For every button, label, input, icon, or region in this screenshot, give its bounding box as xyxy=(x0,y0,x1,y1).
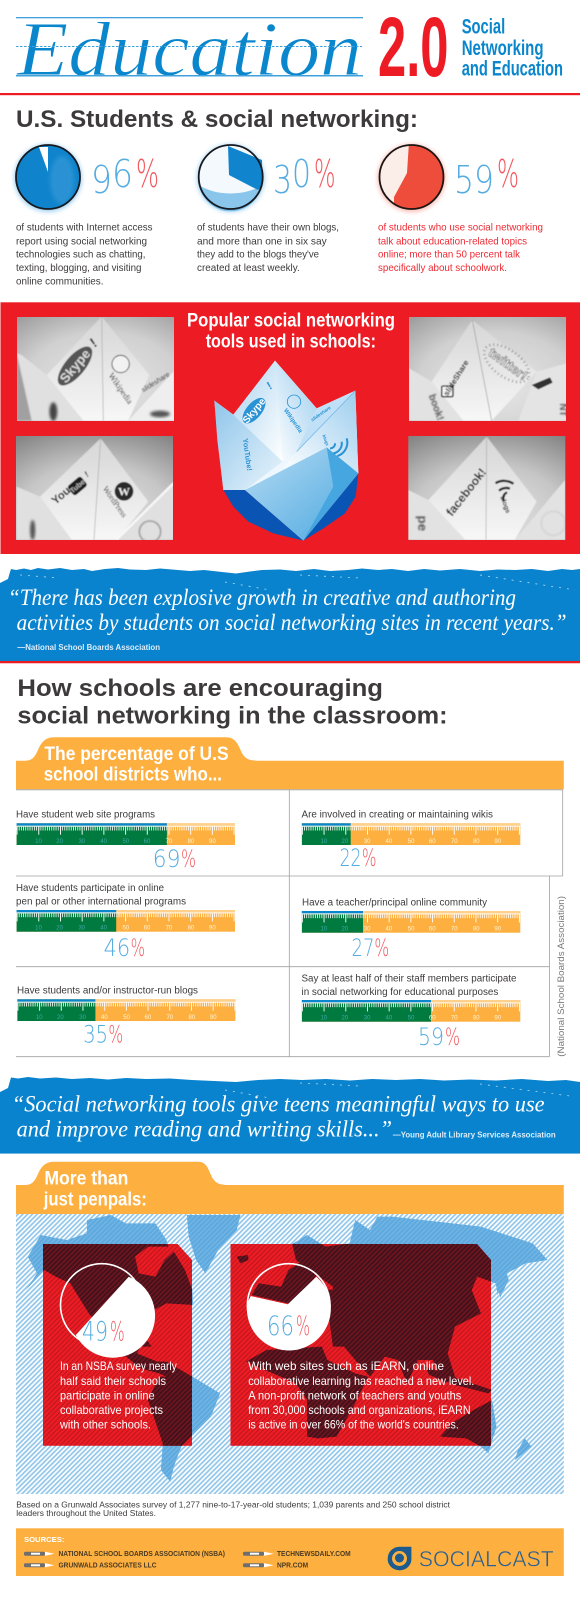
stat row: online community 27 percent: Have a teacher/principal online community xyxy=(302,897,487,908)
stat: 59 percent: of students who use social networking xyxy=(378,223,543,234)
stat row: pen pal programs 46 percent: 10 xyxy=(35,926,42,932)
stat row: blogs 35 percent: 20 xyxy=(57,1015,64,1021)
quote band: school boards xyxy=(0,568,580,664)
box text: NSBA survey: collaborative projects xyxy=(60,1404,163,1417)
stat row: online community 27 percent: 60 xyxy=(429,926,436,932)
quote text xyxy=(12,1092,545,1142)
stat: 96 percent: 9 xyxy=(91,158,112,202)
sources bar xyxy=(16,1528,564,1576)
stat row: pen pal programs 46 percent: 70 xyxy=(166,926,173,932)
photo: youtube and wordpress: W xyxy=(118,485,130,499)
pie: 49 percent xyxy=(61,1264,155,1358)
stat: 96 percent: 6 xyxy=(112,152,133,196)
stat row: blogs 35 percent: 35 xyxy=(83,1021,108,1049)
stat row: online community 27 percent: % xyxy=(374,934,389,962)
stat row: web site programs 69 percent: Have student web site programs xyxy=(16,810,155,821)
panel heading: tools used in schools: xyxy=(206,331,376,353)
photo: slideshare and twitter: slideShare xyxy=(442,358,471,398)
stat row: staff participation 59 percent xyxy=(302,973,520,1051)
photo: facebook and blogs: facebook! xyxy=(443,466,489,519)
photo: skype and wikipedia: ! xyxy=(87,335,100,350)
stat row: pen pal programs 46 percent: 30 xyxy=(78,926,86,932)
photo: youtube and wordpress xyxy=(13,433,177,543)
stat row: staff participation 59 percent: 70 xyxy=(451,1016,458,1022)
box text: iEARN: from 30,000 schools and organizations, iEARN xyxy=(248,1404,471,1417)
heading: U.S. students: U.S. Students & social networking: xyxy=(16,106,418,133)
stat row: blogs 35 percent: 70 xyxy=(166,1015,174,1021)
stat row: blogs 35 percent: 50 xyxy=(123,1015,131,1021)
stat: 96 percent: of students with Internet access xyxy=(16,223,152,234)
photo: skype and wikipedia: Skype xyxy=(57,346,93,386)
stat row: wikis 22 percent: 10 xyxy=(320,839,328,845)
illustration: blue paper fortune teller: slideshare xyxy=(310,405,332,422)
subtitle: Networking xyxy=(462,37,544,60)
stat: 30 percent: created at least weekly. xyxy=(197,263,300,274)
stat row: pen pal programs 46 percent: 50 xyxy=(122,926,130,932)
vertical source note: (National School Boards Association) xyxy=(556,896,566,1057)
stat row: online community 27 percent: 10 xyxy=(320,926,328,932)
stat row: online community 27 percent: 20 xyxy=(342,926,349,932)
source list: NATIONAL SCHOOL BOARDS ASSOCIATION (NSBA) xyxy=(58,1549,226,1558)
pie: 66 percent xyxy=(247,1264,331,1350)
box text: NSBA survey: participate in online xyxy=(60,1389,155,1402)
box text: NSBA survey xyxy=(59,1360,177,1432)
banner: more than just penpals: just penpals: xyxy=(43,1189,147,1210)
photo: slideshare and twitter: NT xyxy=(557,403,568,417)
stat row: online community 27 percent: 80 xyxy=(473,926,480,932)
stat row: pen pal programs 46 percent: 90 xyxy=(209,926,216,932)
red box left xyxy=(43,1244,192,1446)
quote text: and improve reading and writing skills...” xyxy=(17,1117,392,1142)
panel: popular tools xyxy=(0,302,580,554)
illustration: blue paper fortune teller: Wikipedia xyxy=(282,408,303,435)
stat row: pen pal programs 46 percent: 40 xyxy=(100,926,108,932)
stat row: wikis 22 percent: 80 xyxy=(473,839,480,845)
stat: 96 percent: % xyxy=(136,152,159,196)
box text: iEARN xyxy=(248,1360,474,1432)
stat row: blogs 35 percent: Have students and/or instructor-run blogs xyxy=(17,985,198,996)
stat row: staff participation 59 percent: 30 xyxy=(364,1016,371,1022)
stat row: staff participation 59 percent: 90 xyxy=(494,1016,502,1022)
socialcast logo: SOCIALCAST xyxy=(419,1547,554,1572)
heading: how schools: social networking in the classroom: xyxy=(17,702,448,729)
panel heading xyxy=(187,310,395,353)
pencil icons xyxy=(24,1552,274,1567)
photo: youtube and wordpress: Tube xyxy=(68,477,87,495)
stat row: blogs 35 percent: 10 xyxy=(36,1015,43,1021)
stat row: pen pal programs 46 percent: 46 xyxy=(104,934,130,962)
panel heading: Popular social networking xyxy=(187,310,395,332)
banner: more than just penpals xyxy=(16,1162,564,1214)
title: Education 2.0 xyxy=(16,0,449,94)
stat row: online community 27 percent: 30 xyxy=(364,926,371,932)
title: Education 2.0: Education xyxy=(16,6,362,92)
stat row: wikis 22 percent: 70 xyxy=(451,839,458,845)
stat row: web site programs 69 percent: 30 xyxy=(78,839,86,845)
stat row: online community 27 percent: 40 xyxy=(386,926,393,932)
photo: facebook and blogs: blogs xyxy=(498,495,511,515)
stat row: web site programs 69 percent: % xyxy=(181,845,196,873)
stat row: wikis 22 percent: 40 xyxy=(386,839,393,845)
stat row: staff participation 59 percent: 80 xyxy=(473,1016,480,1022)
stat: 96 percent: online communities. xyxy=(16,276,104,287)
stat row: web site programs 69 percent xyxy=(16,810,235,873)
subtitle: Social xyxy=(462,16,505,38)
stat row: wikis 22 percent: 60 xyxy=(429,839,436,845)
banner: more than just penpals: More than xyxy=(44,1168,128,1189)
photo: skype and wikipedia: slideshare xyxy=(141,371,171,394)
stat row: blogs 35 percent: 60 xyxy=(144,1015,152,1021)
stat: 96 percent: report using social networking xyxy=(16,236,147,247)
box text: iEARN: collaborative learning has reached a new level. xyxy=(248,1375,474,1388)
stat row: blogs 35 percent: 90 xyxy=(210,1015,217,1021)
stat: 59 percent xyxy=(378,144,543,274)
photo: youtube and wordpress: ! xyxy=(83,469,90,479)
footnote xyxy=(16,1500,451,1518)
stat row: web site programs 69 percent: 69 xyxy=(153,845,180,873)
subtitle xyxy=(462,16,563,81)
heading: how schools: How schools are encouraging xyxy=(17,675,383,702)
photo: youtube and wordpress: You xyxy=(50,485,73,507)
stat: 96 percent: technologies such as chatting, xyxy=(16,250,146,261)
stat: 59 percent: online; more than 50 percent talk xyxy=(378,250,521,261)
source list: NPR.COM xyxy=(277,1561,308,1570)
red box right xyxy=(230,1244,491,1446)
stat row: wikis 22 percent: 20 xyxy=(342,839,349,845)
pie: 66 percent: 66 xyxy=(267,1311,294,1342)
banner: percentage of districts: The percentage of U.S xyxy=(44,744,229,765)
quote band: library association xyxy=(0,1077,580,1154)
source list xyxy=(58,1549,351,1570)
stat row: staff participation 59 percent: % xyxy=(445,1023,460,1051)
footnote: Based on a Grunwald Associates survey of 1,277 nine-to-17-year-old students; 1,039 parents and 250 school district xyxy=(16,1500,451,1510)
stat row: web site programs 69 percent: 20 xyxy=(56,839,64,845)
stat: 30 percent xyxy=(197,144,339,274)
stat row: pen pal programs 46 percent: 20 xyxy=(56,926,64,932)
stat row: pen pal programs 46 percent: % xyxy=(131,934,145,962)
stat row: online community 27 percent: 50 xyxy=(408,926,415,932)
stat row: web site programs 69 percent: 60 xyxy=(144,839,151,845)
box text: iEARN: A non-profit network of teachers and youths xyxy=(248,1389,461,1402)
stat row: staff participation 59 percent: 50 xyxy=(408,1016,415,1022)
box text: iEARN: is active in over 66% of the world's countries. xyxy=(248,1419,459,1432)
stat row: staff participation 59 percent: Say at least half of their staff members participate xyxy=(302,973,517,984)
sources heading: SOURCES: xyxy=(24,1535,64,1544)
stat row: staff participation 59 percent: 59 xyxy=(418,1023,444,1051)
box text: iEARN: With web sites such as iEARN, online xyxy=(248,1360,444,1373)
stat row: web site programs 69 percent: 70 xyxy=(166,839,173,845)
stat row: staff participation 59 percent: in social networking for educational purposes xyxy=(302,987,498,998)
stat row: wikis 22 percent: 30 xyxy=(364,839,371,845)
footnote: leaders throughout the United States. xyxy=(16,1508,156,1518)
stat: 59 percent: 59 xyxy=(454,158,494,202)
photo: slideshare and twitter xyxy=(407,313,570,423)
stat: 96 percent: texting, blogging, and visiting xyxy=(16,263,142,274)
box text: NSBA survey: half said their schools xyxy=(60,1375,166,1388)
quote attribution: —Young Adult Library Services Association xyxy=(393,1129,556,1139)
stat row: wikis 22 percent xyxy=(302,810,520,872)
stat row: online community 27 percent: 90 xyxy=(494,926,502,932)
stat row: wikis 22 percent: % xyxy=(362,844,377,872)
photo: facebook and blogs xyxy=(407,433,570,543)
box text: NSBA survey: In an NSBA survey nearly xyxy=(60,1360,177,1373)
photo: skype and wikipedia: Wikipedia xyxy=(106,371,135,406)
photo: youtube and wordpress: WordPress xyxy=(101,485,129,519)
stat row: pen pal programs 46 percent: Have students participate in online xyxy=(16,883,164,894)
title: Education 2.0: 2.0 xyxy=(378,0,448,94)
stat row: wikis 22 percent: 22 xyxy=(340,844,362,872)
stat: 30 percent: they add to the blogs they've xyxy=(197,250,319,261)
stat row: blogs 35 percent: 30 xyxy=(79,1015,87,1021)
photo: slideshare and twitter: twitter! xyxy=(486,345,530,383)
stat: 30 percent: and more than one in six say xyxy=(197,236,327,247)
source list: TECHNEWSDAILY.COM xyxy=(277,1549,351,1558)
stat row: blogs 35 percent xyxy=(17,985,235,1049)
source list: GRUNWALD ASSOCIATES LLC xyxy=(58,1561,156,1570)
stat row: pen pal programs 46 percent: 60 xyxy=(144,926,151,932)
stat row: blogs 35 percent: 40 xyxy=(101,1015,108,1021)
stat row: pen pal programs 46 percent xyxy=(16,883,235,962)
pie: 49 percent: 49 xyxy=(82,1317,108,1348)
illustration: blue paper fortune teller: Skype xyxy=(241,396,269,426)
stat: 30 percent: 0 xyxy=(292,152,311,196)
pie: 49 percent: % xyxy=(110,1317,125,1348)
stat row: pen pal programs 46 percent: pen pal or other international programs xyxy=(16,896,186,907)
stat: 59 percent: talk about education-related topics xyxy=(378,236,527,247)
stat: 59 percent: % xyxy=(497,152,519,196)
stat row: online community 27 percent xyxy=(302,897,520,962)
stat row: web site programs 69 percent: 80 xyxy=(188,839,195,845)
stat: 59 percent: specifically about schoolwork. xyxy=(378,263,507,274)
stat row: blogs 35 percent: 80 xyxy=(188,1015,196,1021)
photo: slideshare and twitter: book! xyxy=(426,393,445,422)
illustration: blue paper fortune teller: YouTube! xyxy=(241,438,254,471)
stat row: blogs 35 percent: % xyxy=(108,1021,123,1049)
banner: percentage of districts xyxy=(16,737,564,789)
stat row: staff participation 59 percent: 60 xyxy=(429,1016,436,1022)
stat row: staff participation 59 percent: 20 xyxy=(342,1016,349,1022)
illustration: blue paper fortune teller: blogs xyxy=(321,434,330,447)
world map panel xyxy=(16,1214,564,1494)
stat row: web site programs 69 percent: 40 xyxy=(100,839,108,845)
pie: 66 percent: % xyxy=(296,1311,310,1342)
stat row: wikis 22 percent: Are involved in creating or maintaining wikis xyxy=(302,810,493,821)
stat: 30 percent: 3 xyxy=(273,158,292,202)
quote attribution: —National School Boards Association xyxy=(17,642,160,652)
illustration: blue paper fortune teller xyxy=(214,361,358,541)
quote text xyxy=(8,585,567,635)
stat row: web site programs 69 percent: 50 xyxy=(122,839,130,845)
illustration: blue paper fortune teller: ! xyxy=(265,380,274,393)
stat row: web site programs 69 percent: 10 xyxy=(35,839,42,845)
quote text: “There has been explosive growth in creative and authoring xyxy=(8,585,516,610)
heading: how schools xyxy=(17,675,448,729)
quote text: “Social networking tools give teens meaningful ways to use xyxy=(12,1092,545,1117)
photo: facebook and blogs: pe xyxy=(415,516,430,531)
stat row: staff participation 59 percent: 40 xyxy=(386,1016,393,1022)
stat row: wikis 22 percent: 90 xyxy=(494,839,502,845)
stat row: staff participation 59 percent: 10 xyxy=(320,1016,328,1022)
banner: percentage of districts: school districts who... xyxy=(44,765,222,786)
stat row: online community 27 percent: 70 xyxy=(451,926,458,932)
stat: 96 percent xyxy=(14,144,159,287)
stat row: wikis 22 percent: 50 xyxy=(408,839,415,845)
photo: skype and wikipedia xyxy=(13,313,177,423)
stat row: web site programs 69 percent: 90 xyxy=(209,839,216,845)
stat: 30 percent: % xyxy=(314,152,336,196)
stat row: pen pal programs 46 percent: 80 xyxy=(188,926,195,932)
stat: 30 percent: of students have their own blogs, xyxy=(197,223,339,234)
stat row: online community 27 percent: 27 xyxy=(352,934,374,962)
box text: NSBA survey: with other schools. xyxy=(59,1419,151,1432)
